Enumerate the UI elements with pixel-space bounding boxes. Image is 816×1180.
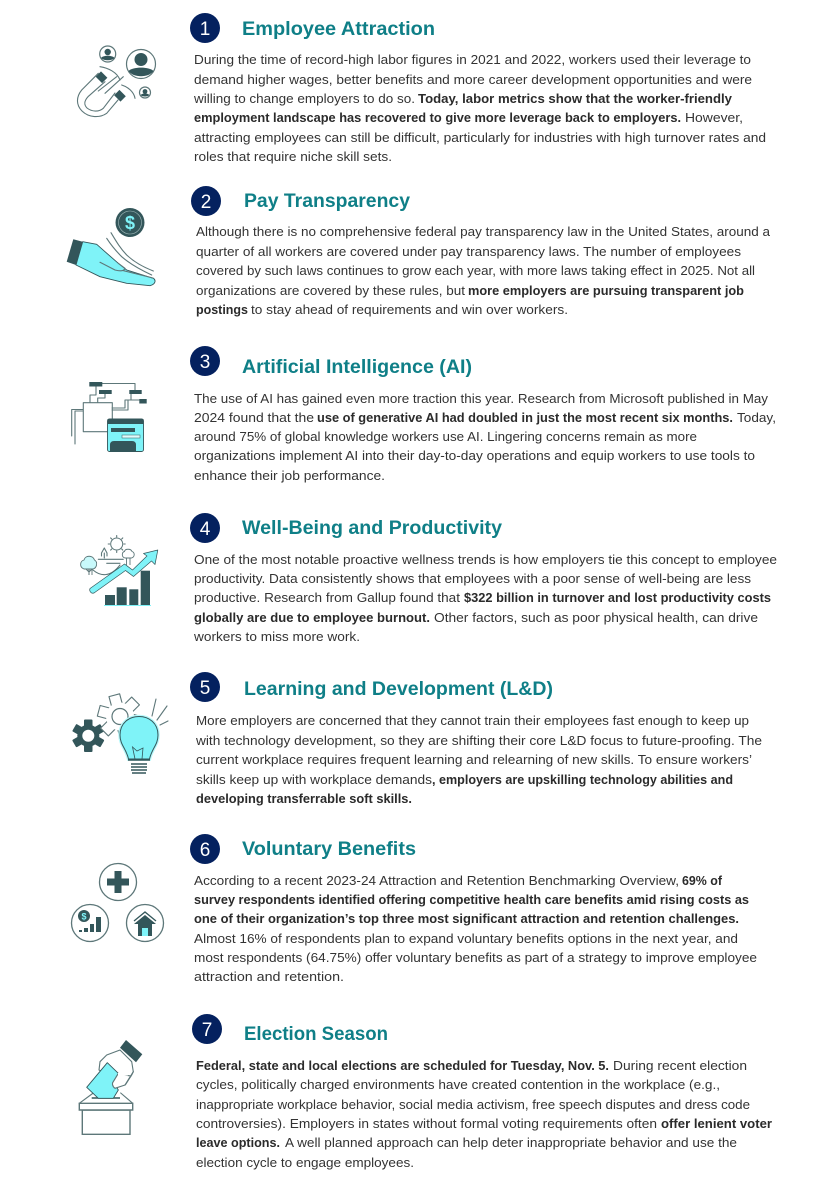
text block: Artificial Intelligence: Today, <box>737 410 776 425</box>
icon: ballot box <box>79 1040 142 1134</box>
text block: Artificial Intelligence: 2024 found that the <box>194 410 314 425</box>
icon: hand with dollar coin: $ <box>125 213 135 233</box>
icon: gears and light bulb <box>72 694 168 773</box>
text block: Artificial Intelligence: organizations implement AI into their day-to-day operations and equip workers to use tools to <box>194 448 755 463</box>
text block: Employee Attraction: However, <box>685 110 743 125</box>
text block: Well-Being and Productivity: productivity. Data consistently shows that employees with a poor sense of well-being are less <box>194 571 751 586</box>
heading: Election Season: Election Season <box>244 1024 388 1045</box>
icon: benefits circles <box>72 864 164 942</box>
text block: Learning and Development: , employers are upskilling technology abilities and <box>432 772 733 787</box>
text block: Voluntary Benefits: attraction and retention. <box>194 969 344 984</box>
text block: Well-Being and Productivity: globally are due to employee burnout. <box>194 610 430 625</box>
text block: Well-Being and Productivity: Other factors, such as poor physical health, can drive <box>434 610 758 625</box>
number badge 6: 6 <box>200 840 210 861</box>
icon: benefits circles: $ <box>81 912 87 922</box>
heading: Artificial Intelligence (AI): Artificial Intelligence (AI) <box>242 357 472 378</box>
text block: Election Season: cycles, politically charged environments have created contention in the workplace (e.g., <box>196 1077 720 1092</box>
heading: Well-Being and Productivity: Well-Being and Productivity <box>242 518 502 539</box>
text block: Pay Transparency <box>196 224 771 317</box>
text block: Pay Transparency: covered by such laws continues to grow each year, with more laws taking effect in 2025. Not all <box>196 263 755 278</box>
number badge 2 <box>191 186 221 216</box>
text block: Election Season: controversies). Employers in states without formal voting requirements often <box>196 1116 657 1131</box>
text block: Learning and Development: developing transferrable soft skills. <box>196 791 412 806</box>
text block: Well-Being and Productivity <box>193 552 777 644</box>
number badge 3: 3 <box>200 352 210 373</box>
text block: Voluntary Benefits <box>194 873 757 984</box>
text block: Election Season: leave options. <box>196 1135 280 1150</box>
text block: Artificial Intelligence: enhance their job performance. <box>194 468 385 483</box>
text block: Artificial Intelligence <box>194 391 776 483</box>
number badge 1: 1 <box>200 19 210 40</box>
text block: Election Season <box>196 1058 772 1170</box>
number badge 4: 4 <box>200 519 211 540</box>
text block: Election Season: During recent election <box>613 1058 747 1073</box>
text block: Election Season: election cycle to engage employees. <box>196 1155 414 1170</box>
text block: Artificial Intelligence: The use of AI has gained even more traction this year. Research from Microsoft published in May <box>194 391 769 406</box>
number badge 5 <box>190 672 220 702</box>
text block: Voluntary Benefits: one of their organization’s top three most significant attraction and retention challenges. <box>194 911 739 926</box>
text block: Learning and Development <box>195 713 762 806</box>
text block: Voluntary Benefits: most respondents (64.75%) offer voluntary benefits as part of a strategy to improve employee <box>194 950 757 965</box>
text block: Employee Attraction: Today, labor metrics show that the worker-friendly <box>418 91 733 106</box>
text block: Election Season: offer lenient voter <box>661 1116 772 1131</box>
text block: Well-Being and Productivity: One of the most notable proactive wellness trends is how employers tie this concept to employee <box>194 552 777 567</box>
text block: Pay Transparency: more employers are pursuing transparent job <box>468 283 744 298</box>
number badge 1 <box>190 13 220 43</box>
text block: Employee Attraction: employment landscape has recovered to give more leverage back to employers. <box>194 110 681 125</box>
icon: rising chart with wellness scene <box>81 535 158 606</box>
text block: Election Season: inappropriate workplace behavior, social media activism, free speech disputes and dress code <box>196 1097 750 1112</box>
text block: Artificial Intelligence: around 75% of global knowledge workers use AI. Lingering concerns remain as more <box>194 429 697 444</box>
text block: Pay Transparency: to stay ahead of requirements and win over workers. <box>251 302 568 317</box>
text block: Voluntary Benefits: survey respondents identified offering competitive health care benefits amid rising costs as <box>194 892 749 907</box>
text block: Well-Being and Productivity: workers to miss more work. <box>193 629 360 644</box>
icon: magnet attracting people <box>77 46 156 117</box>
number badge 5: 5 <box>200 678 210 699</box>
text block: Well-Being and Productivity: $322 billion in turnover and lost productivity costs <box>464 590 771 605</box>
text block: Voluntary Benefits: 69% of <box>682 873 723 888</box>
text block: Pay Transparency: organizations are covered by these rules, but <box>196 283 465 298</box>
text block: Learning and Development: More employers are concerned that they cannot train their employees fast enough to keep up <box>196 713 749 728</box>
number badge 3 <box>190 346 220 376</box>
text block: Employee Attraction: attracting employees can still be difficult, particularly for industries with high turnover rates and <box>194 130 766 145</box>
text block: Election Season: Federal, state and local elections are scheduled for Tuesday, Nov. 5. <box>196 1058 609 1073</box>
text block: Employee Attraction: demand higher wages, better benefits and more career development opportunities and were <box>194 72 752 87</box>
text block: Pay Transparency: postings <box>196 302 248 317</box>
text block: Learning and Development: skills keep up with workplace demands <box>196 772 432 787</box>
text block: Well-Being and Productivity: productive. Research from Gallup found that <box>194 590 460 605</box>
text block: Employee Attraction: willing to change employers to do so. <box>193 91 415 106</box>
text block: Voluntary Benefits: According to a recent 2023-24 Attraction and Retention Benchmarking Overview, <box>194 873 679 888</box>
number badge 4 <box>190 513 220 543</box>
heading: Pay Transparency: Pay Transparency <box>244 191 410 212</box>
heading: Employee Attraction: Employee Attraction <box>242 19 435 40</box>
icon: AI flow diagram <box>72 382 147 452</box>
text block: Employee Attraction: roles that require niche skill sets. <box>194 149 392 164</box>
text block: Employee Attraction: During the time of record-high labor figures in 2021 and 2022, workers used their leverage to <box>194 52 751 67</box>
heading: Learning and Development (L&D): Learning and Development (L&D) <box>244 679 553 700</box>
icon: hand with dollar coin <box>67 208 155 286</box>
text block: Voluntary Benefits: Almost 16% of respondents plan to expand voluntary benefits options in the next year, and <box>194 931 738 946</box>
text block: Pay Transparency: quarter of all workers are covered under pay transparency laws. The number of employees <box>196 244 741 259</box>
number badge 2: 2 <box>201 192 211 213</box>
number badge 6 <box>190 834 220 864</box>
text block: Learning and Development: current workplace requires frequent learning and relearning of new skills. To ensure workers’ <box>196 752 752 767</box>
text block: Pay Transparency: Although there is no comprehensive federal pay transparency law in the United States, around a <box>196 224 771 239</box>
text block: Artificial Intelligence: use of generative AI had doubled in just the most recent six months. <box>317 410 733 425</box>
text block: Learning and Development: with technology development, so they are shifting their core L&D focus to future-proofing. The <box>195 733 762 748</box>
text block: Election Season: A well planned approach can help deter inappropriate behavior and use the <box>285 1135 737 1150</box>
heading: Voluntary Benefits: Voluntary Benefits <box>242 839 416 860</box>
number badge 7: 7 <box>202 1020 212 1041</box>
number badge 7 <box>192 1014 222 1044</box>
text block: Employee Attraction <box>193 52 766 164</box>
